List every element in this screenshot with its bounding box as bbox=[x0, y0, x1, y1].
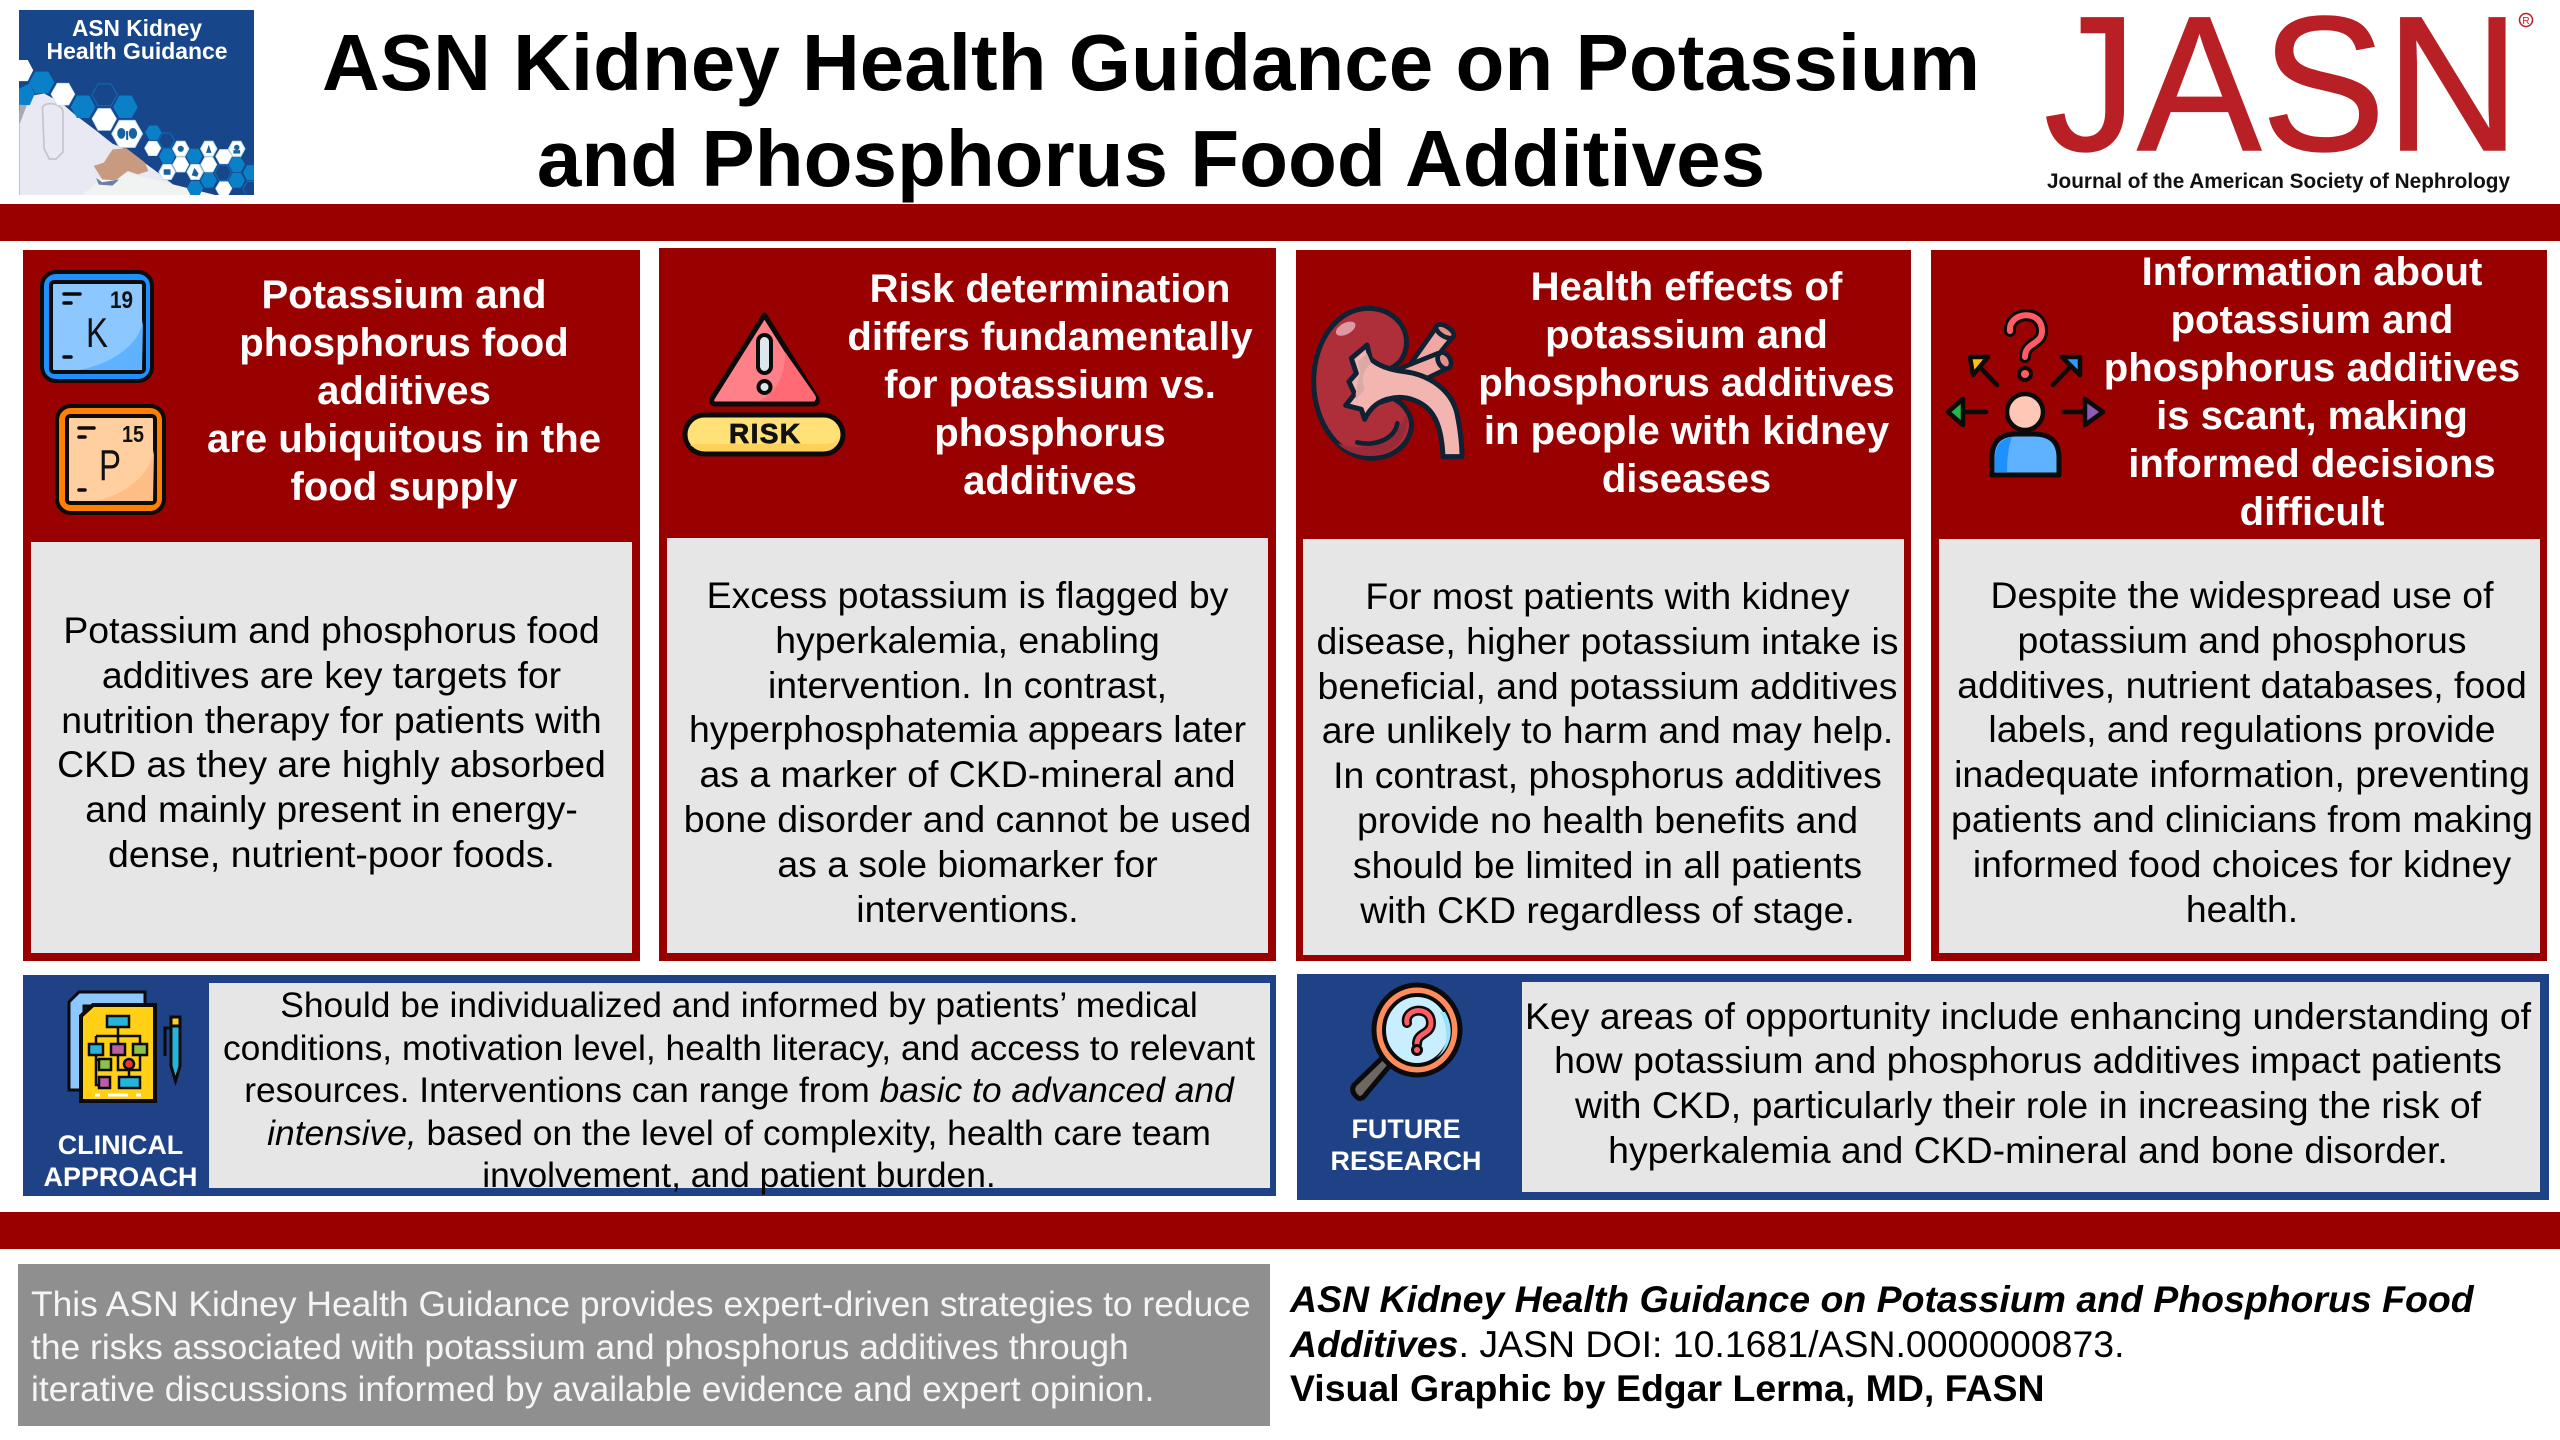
heading: potassium and bbox=[1545, 312, 1828, 356]
heading bbox=[847, 266, 1253, 502]
heading: additives bbox=[317, 369, 491, 413]
text: involvement, and patient burden. bbox=[482, 1155, 996, 1195]
heading bbox=[207, 273, 601, 509]
icon: potassium element tile: 19 bbox=[110, 287, 133, 314]
body card bbox=[667, 538, 1268, 953]
body text: interventions. bbox=[856, 888, 1079, 930]
text: conditions, motivation level, health literacy, and access to relevant bbox=[223, 1028, 1255, 1068]
heading: potassium and bbox=[2171, 298, 2453, 342]
body text: inadequate information, preventing bbox=[1954, 753, 2530, 795]
body text: as a sole biomarker for bbox=[777, 843, 1158, 885]
body text: In contrast, phosphorus additives bbox=[1333, 754, 1882, 796]
body text: disease, higher potassium intake is bbox=[1317, 620, 1898, 662]
heading: difficult bbox=[2240, 490, 2384, 534]
heading: phosphorus additives bbox=[2104, 346, 2520, 390]
body text: patients and clinicians from making bbox=[1951, 798, 2533, 840]
text bbox=[223, 985, 1255, 1195]
text: Key areas of opportunity include enhancing understanding of bbox=[1525, 994, 2531, 1036]
heading: are ubiquitous in the bbox=[207, 417, 601, 461]
heading: phosphorus additives bbox=[1478, 360, 1895, 404]
heading: food supply bbox=[290, 465, 518, 509]
citation: Visual Graphic by Edgar Lerma, MD, FASN bbox=[1290, 1367, 2045, 1409]
heading: phosphorus food bbox=[239, 321, 569, 365]
body text: informed food choices for kidney bbox=[1973, 843, 2511, 885]
body text: hyperkalemia, enabling bbox=[775, 619, 1160, 661]
citation: ASN Kidney Health Guidance on Potassium and Phosphorus Food bbox=[1290, 1278, 2474, 1320]
body text: nutrition therapy for patients with bbox=[61, 699, 602, 741]
body text bbox=[1951, 574, 2533, 930]
icon: kidney bbox=[1311, 306, 1464, 461]
summary box bbox=[18, 1264, 1270, 1426]
icon: risk warning: RISK bbox=[729, 418, 800, 449]
title bbox=[322, 18, 1980, 203]
citation: Additives. JASN DOI: 10.1681/ASN.0000000873. bbox=[1290, 1323, 2124, 1365]
text: Should be individualized and informed by patients’ medical bbox=[280, 985, 1198, 1025]
citation bbox=[1289, 1278, 2474, 1409]
body card bbox=[31, 542, 632, 953]
logo: ASN Kidney Health Guidance bbox=[19, 10, 254, 195]
body text: dense, nutrient-poor foods. bbox=[108, 833, 555, 875]
body text: with CKD regardless of stage. bbox=[1360, 889, 1855, 931]
summary text: This ASN Kidney Health Guidance provides expert-driven strategies to reduce bbox=[31, 1284, 1251, 1324]
body text: provide no health benefits and bbox=[1357, 799, 1858, 841]
body text: potassium and phosphorus bbox=[2018, 619, 2466, 661]
panel: risk determination bbox=[659, 248, 1276, 961]
body text: as a marker of CKD-mineral and bbox=[699, 753, 1236, 795]
heading: Health effects of bbox=[1531, 264, 1842, 308]
body text bbox=[57, 609, 606, 875]
text card bbox=[1522, 982, 2540, 1192]
heading bbox=[2104, 250, 2520, 534]
logo: JASN journal: Journal of the American Society of Nephrology bbox=[2047, 170, 2510, 193]
text: with CKD, particularly their role in increasing the risk of bbox=[1575, 1084, 2481, 1126]
label: CLINICAL bbox=[58, 1130, 183, 1160]
label bbox=[1331, 1114, 1481, 1176]
panel: health effects bbox=[1296, 250, 1911, 961]
label: APPROACH bbox=[44, 1162, 197, 1192]
body text: bone disorder and cannot be used bbox=[684, 798, 1251, 840]
icon: magnifier with question mark bbox=[1350, 982, 1462, 1101]
label: RESEARCH bbox=[1331, 1146, 1481, 1176]
body text: Potassium and phosphorus food bbox=[63, 609, 600, 651]
top red banner bbox=[0, 204, 2560, 241]
body text: labels, and regulations provide bbox=[1988, 708, 2496, 750]
summary text: the risks associated with potassium and phosphorus additives through bbox=[31, 1326, 1129, 1366]
icon: person with question and arrows bbox=[1946, 309, 2106, 478]
text: resources. Interventions can range from basic to advanced and bbox=[244, 1070, 1234, 1110]
body text: Despite the widespread use of bbox=[1990, 574, 2494, 616]
body text: Excess potassium is flagged by bbox=[707, 574, 1228, 616]
summary text: iterative discussions informed by available evidence and expert opinion. bbox=[31, 1369, 1154, 1409]
body text: additives are key targets for bbox=[102, 654, 561, 696]
heading: Information about bbox=[2142, 250, 2482, 294]
body text: health. bbox=[2186, 888, 2298, 930]
text card bbox=[209, 983, 1270, 1188]
title: and Phosphorus Food Additives bbox=[537, 114, 1765, 203]
panel: future research bbox=[1297, 974, 2549, 1200]
heading: Risk determination bbox=[870, 266, 1230, 310]
body card bbox=[1303, 539, 1904, 955]
body text bbox=[684, 574, 1251, 930]
panel: potassium and phosphorus additives are ubiquitous bbox=[23, 250, 640, 961]
body text: should be limited in all patients bbox=[1353, 844, 1862, 886]
heading: for potassium vs. bbox=[884, 362, 1216, 406]
text: intensive, based on the level of complexity, health care team bbox=[267, 1112, 1211, 1152]
body text: and mainly present in energy- bbox=[85, 788, 578, 830]
icon: phosphorus element tile: P bbox=[99, 441, 121, 490]
heading: in people with kidney bbox=[1484, 408, 1889, 452]
panel: information is scant bbox=[1931, 250, 2547, 961]
logo: ASN Kidney Health Guidance: ASN Kidney bbox=[72, 15, 202, 41]
body text: beneficial, and potassium additives bbox=[1318, 665, 1897, 707]
title: ASN Kidney Health Guidance on Potassium bbox=[322, 18, 1980, 107]
label bbox=[44, 1130, 197, 1192]
body text: intervention. In contrast, bbox=[768, 664, 1167, 706]
heading bbox=[1478, 264, 1895, 500]
icon: flowchart document with pen bbox=[68, 990, 182, 1103]
heading: additives bbox=[963, 458, 1137, 502]
heading: is scant, making bbox=[2156, 394, 2468, 438]
heading: differs fundamentally bbox=[847, 314, 1253, 358]
label: FUTURE bbox=[1351, 1114, 1461, 1144]
heading: informed decisions bbox=[2128, 442, 2496, 486]
icon: risk warning bbox=[682, 312, 846, 456]
heading: Potassium and bbox=[261, 273, 547, 317]
body text: CKD as they are highly absorbed bbox=[57, 743, 606, 785]
logo: ASN Kidney Health Guidance: Health Guidance bbox=[46, 38, 228, 64]
body text: hyperphosphatemia appears later bbox=[689, 708, 1246, 750]
text: how potassium and phosphorus additives impact patients bbox=[1554, 1039, 2502, 1081]
body text: For most patients with kidney bbox=[1365, 575, 1850, 617]
body text: additives, nutrient databases, food bbox=[1957, 664, 2527, 706]
icon: phosphorus element tile: 15 bbox=[122, 421, 144, 447]
text: hyperkalemia and CKD-mineral and bone disorder. bbox=[1608, 1129, 2448, 1171]
body card bbox=[1939, 539, 2540, 953]
icon: phosphorus element tile bbox=[55, 404, 166, 515]
icon: potassium element tile: K bbox=[86, 309, 108, 356]
logo: JASN journal: R bbox=[2522, 16, 2530, 27]
text bbox=[1525, 994, 2532, 1171]
bottom red banner bbox=[0, 1212, 2560, 1249]
heading: phosphorus bbox=[934, 410, 1166, 454]
body text: are unlikely to harm and may help. bbox=[1322, 709, 1893, 751]
summary text bbox=[31, 1284, 1251, 1409]
panel: clinical approach bbox=[23, 975, 1276, 1196]
body text bbox=[1317, 575, 1898, 931]
icon: potassium element tile bbox=[40, 270, 154, 383]
heading: diseases bbox=[1602, 456, 1771, 500]
